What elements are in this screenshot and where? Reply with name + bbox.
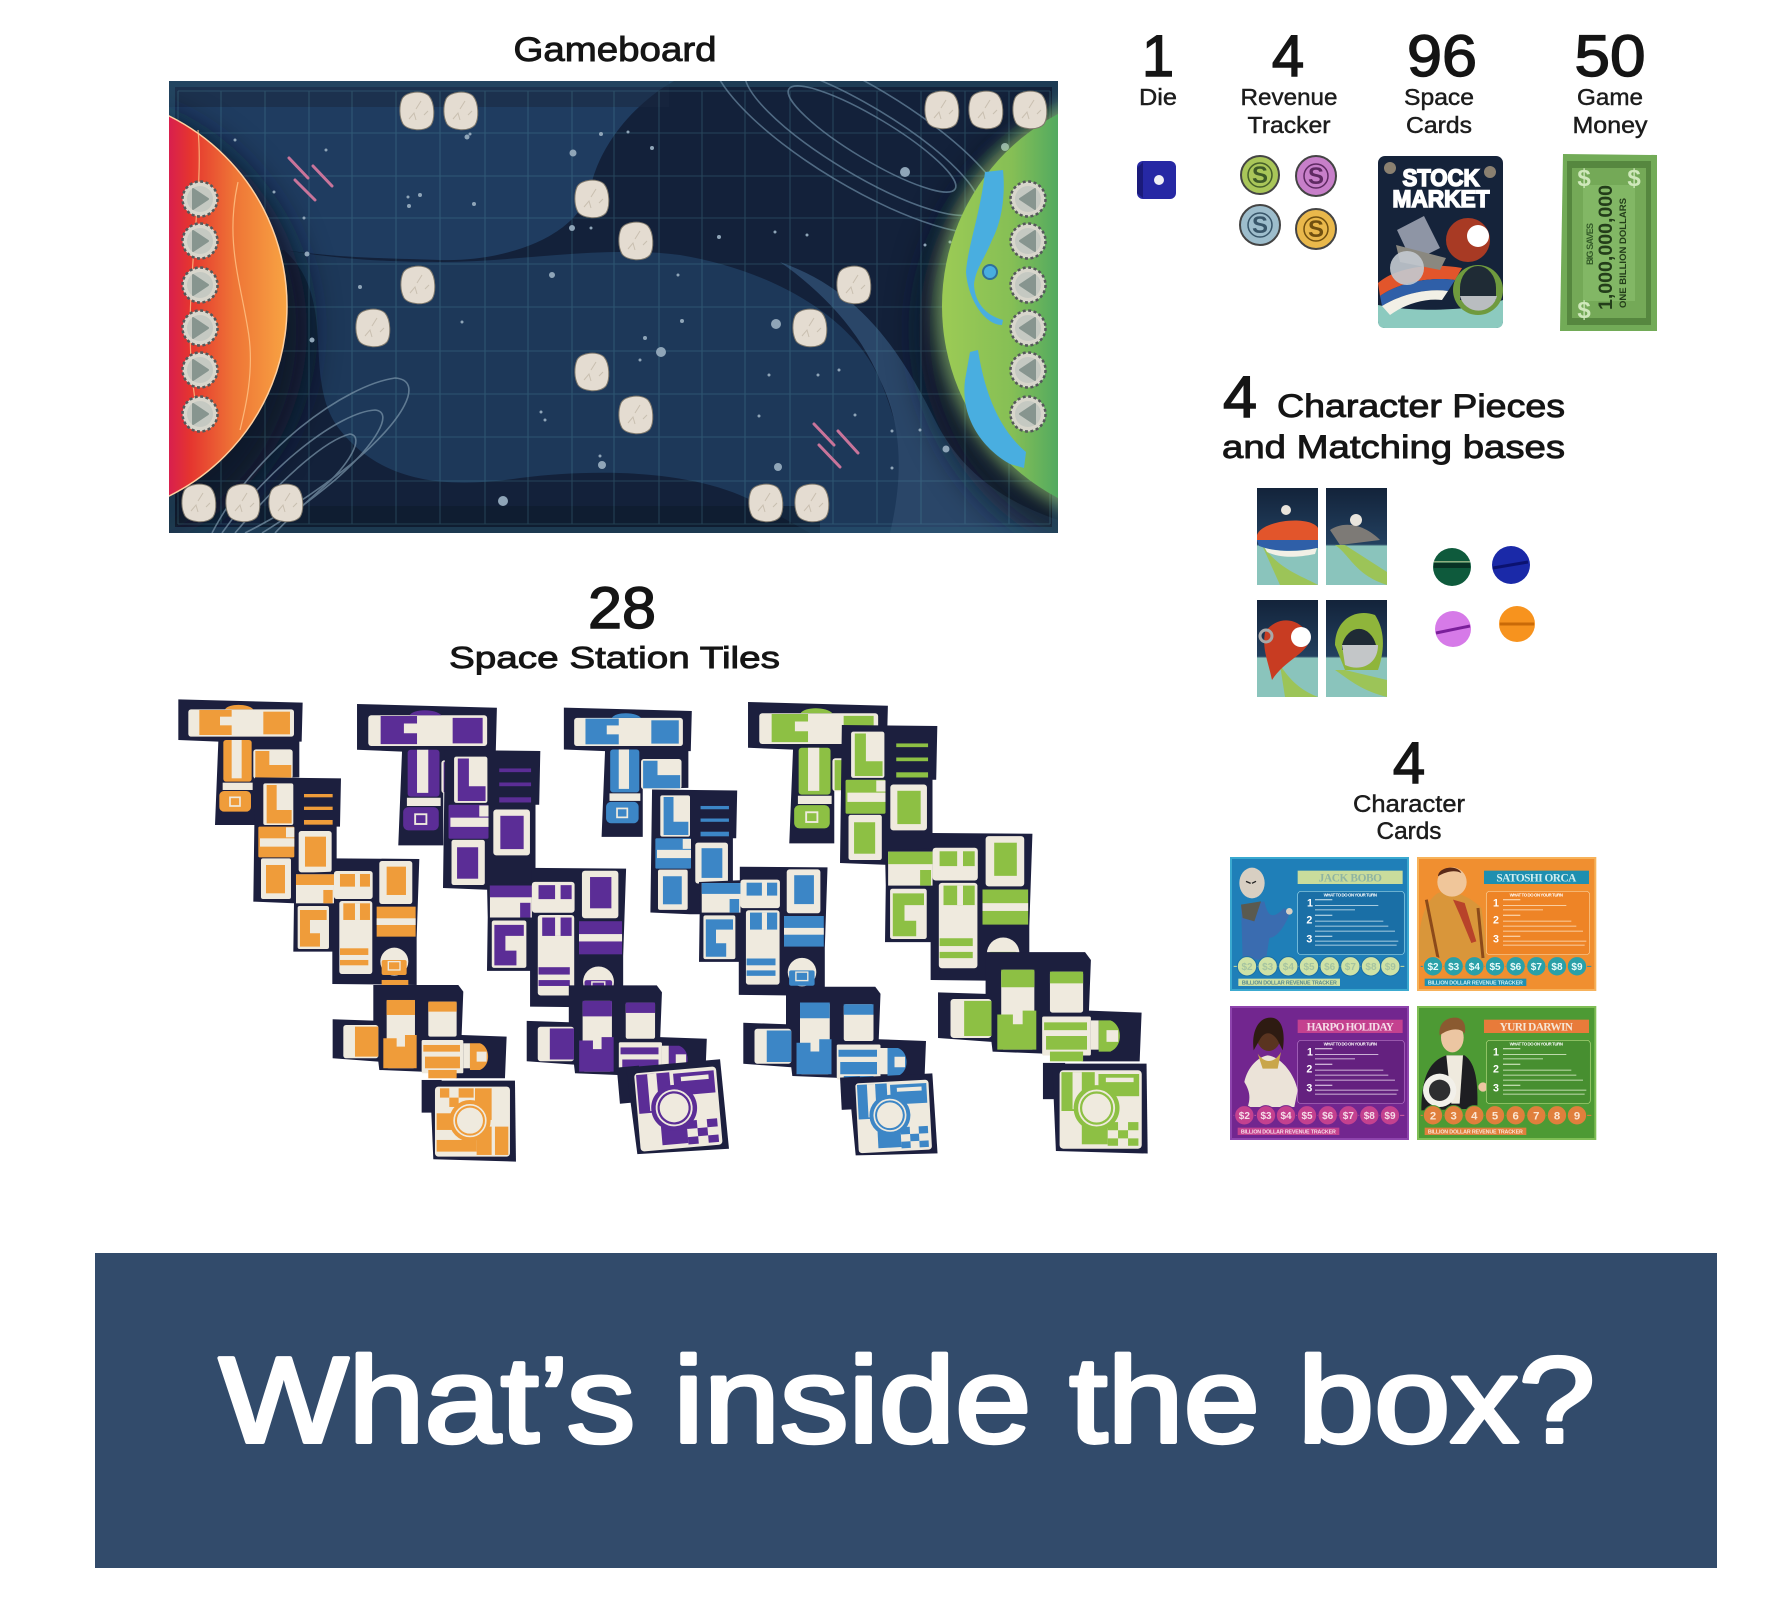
character card: Harpo Holiday: $7 <box>1343 1111 1354 1122</box>
count: 96 Space Cards: Cards <box>1406 112 1472 138</box>
banner <box>95 1253 1717 1568</box>
character card: Satoshi Orca: $4 <box>1469 962 1480 973</box>
character card: Satoshi Orca: WHAT TO DO ON YOUR TURN <box>1510 893 1563 898</box>
character card: Harpo Holiday: 3 <box>1306 1082 1312 1094</box>
tokens: left row <box>182 182 218 432</box>
character card: Jack Bobo: $4 <box>1283 962 1294 973</box>
character card: Harpo Holiday: $2 <box>1239 1111 1250 1122</box>
count: 4 Revenue Tracker: Revenue <box>1240 84 1338 110</box>
asteroids <box>182 91 1047 522</box>
heading: 4 Character Pieces and Matching bases: 4 <box>1223 365 1257 430</box>
character card: Yuri Darwin: 2 <box>1430 1110 1436 1122</box>
character card: Harpo Holiday: 1 <box>1307 1047 1313 1059</box>
tiles: purple <box>357 704 729 1158</box>
banknote: game money: $ <box>1577 297 1591 324</box>
heading: 4 Character Pieces and Matching bases <box>1222 365 1565 465</box>
piece: green globe <box>1326 600 1387 697</box>
character card: Yuri Darwin: YURI DARWIN <box>1500 1021 1574 1033</box>
character card: Jack Bobo: 3 <box>1306 933 1312 945</box>
icon: revenue tracker coins: S <box>1308 216 1324 243</box>
heading: 4 Character Cards: Character <box>1353 791 1465 818</box>
heading: 28 Space Station Tiles: 28 <box>588 576 656 641</box>
grid <box>178 91 1050 524</box>
banknote: game money <box>1560 154 1657 331</box>
character card: Satoshi Orca: SATOSHI ORCA <box>1496 872 1577 884</box>
space regions <box>169 81 1058 533</box>
character card: Jack Bobo: BILLION DOLLAR REVENUE TRACKER <box>1242 980 1337 986</box>
heading: 4 Character Cards: Cards <box>1376 818 1442 845</box>
character card: Satoshi Orca: 2 <box>1493 914 1499 926</box>
card: stock market: STOCK <box>1402 165 1480 192</box>
icon: die <box>1137 161 1176 199</box>
character card: Yuri Darwin: 8 <box>1554 1110 1560 1122</box>
character card: Harpo Holiday: 2 <box>1306 1063 1312 1075</box>
count: 1 Die: 1 <box>1142 24 1174 89</box>
count: 4 Revenue Tracker: 4 <box>1272 24 1304 89</box>
card: stock market <box>1378 156 1503 328</box>
banknote: game money: BIG SAVES <box>1585 223 1595 265</box>
count: 50 Game Money: Game <box>1577 84 1643 110</box>
orbit rings top right <box>720 81 986 232</box>
piece: red pod <box>1257 600 1318 697</box>
character card: Satoshi Orca <box>1418 858 1595 990</box>
character card: Yuri Darwin: WHAT TO DO ON YOUR TURN <box>1510 1042 1563 1047</box>
character card: Satoshi Orca: $2 <box>1427 962 1439 973</box>
count: 50 Game Money: Money <box>1572 112 1648 138</box>
piece: rocket dark <box>1326 488 1387 585</box>
character card: Harpo Holiday: $9 <box>1384 1111 1396 1122</box>
icon: revenue tracker coins <box>1240 156 1336 249</box>
stars <box>234 130 1009 506</box>
character card: Satoshi Orca: $8 <box>1551 962 1563 973</box>
character card: Harpo Holiday: $5 <box>1301 1111 1313 1122</box>
tiles: green <box>748 702 1148 1154</box>
character card: Jack Bobo: $3 <box>1262 962 1274 973</box>
character card: Yuri Darwin: 2 <box>1493 1063 1499 1075</box>
character card: Satoshi Orca: $7 <box>1531 962 1542 973</box>
character card: Jack Bobo: $7 <box>1345 962 1356 973</box>
character card: Jack Bobo: 1 <box>1307 898 1313 910</box>
character card: Harpo Holiday <box>1231 1007 1408 1139</box>
planet: mars <box>169 115 288 497</box>
tiles: blue <box>564 708 938 1158</box>
water <box>966 170 1004 325</box>
character card: Harpo Holiday: BILLION DOLLAR REVENUE TRACKER <box>1241 1129 1336 1135</box>
count: 4 Revenue Tracker: Tracker <box>1248 112 1331 138</box>
character card: Jack Bobo: 2 <box>1306 914 1312 926</box>
character card: Harpo Holiday: HARPO HOLIDAY <box>1307 1021 1394 1033</box>
character pieces <box>1257 488 1387 697</box>
character card: Yuri Darwin: 3 <box>1493 1082 1499 1094</box>
character card: Harpo Holiday: WHAT TO DO ON YOUR TURN <box>1324 1042 1377 1047</box>
character card: Yuri Darwin: BILLION DOLLAR REVENUE TRACKER <box>1428 1129 1523 1135</box>
board frame <box>172 84 1055 530</box>
heading: 28 Space Station Tiles: Space Station Tiles <box>449 640 780 675</box>
banknote: game money: $ <box>1627 165 1641 192</box>
count: 96 Space Cards: 96 <box>1407 24 1477 89</box>
character card: Yuri Darwin: 4 <box>1471 1110 1478 1122</box>
character card: Yuri Darwin: 5 <box>1492 1110 1498 1122</box>
character card: Satoshi Orca: $9 <box>1571 962 1583 973</box>
character card: Satoshi Orca: $3 <box>1448 962 1460 973</box>
count: 1 Die <box>1139 24 1177 110</box>
heading: 4 Character Cards: 4 <box>1393 731 1425 796</box>
heading: 4 Character Cards <box>1353 731 1465 845</box>
character card: Harpo Holiday: $8 <box>1364 1111 1375 1122</box>
count: 50 Game Money <box>1572 24 1648 138</box>
count: 4 Revenue Tracker <box>1240 24 1338 138</box>
character card: Yuri Darwin: 6 <box>1513 1110 1519 1122</box>
heading: 4 Character Pieces and Matching bases: and Matching bases <box>1222 429 1565 465</box>
icon: revenue tracker coins: S <box>1252 162 1268 189</box>
planet: earth <box>924 94 1058 516</box>
character card: Yuri Darwin: 9 <box>1574 1110 1580 1122</box>
icon: revenue tracker coins: S <box>1252 212 1268 239</box>
character card: Harpo Holiday: $6 <box>1322 1111 1334 1122</box>
character card: Jack Bobo: $5 <box>1303 962 1315 973</box>
character card: Jack Bobo: $9 <box>1385 962 1396 973</box>
character card: Satoshi Orca: 1 <box>1493 898 1499 910</box>
character card: Yuri Darwin <box>1418 1007 1595 1139</box>
character card: Harpo Holiday: $4 <box>1280 1111 1292 1122</box>
character card: Jack Bobo: WHAT TO DO ON YOUR TURN <box>1324 893 1377 898</box>
count: 96 Space Cards <box>1404 24 1477 138</box>
gameboard <box>169 81 1058 533</box>
tokens: right row <box>1010 182 1046 432</box>
banner title: What’s inside the box? <box>219 1332 1595 1468</box>
orbit rings lower left <box>212 378 409 533</box>
heading: 28 Space Station Tiles <box>449 576 780 675</box>
character card: Jack Bobo: $2 <box>1241 962 1253 973</box>
icon: revenue tracker coins: S <box>1308 163 1324 190</box>
character card: Harpo Holiday: $3 <box>1260 1111 1272 1122</box>
character card: Jack Bobo: $6 <box>1324 962 1336 973</box>
character card: Satoshi Orca: $6 <box>1510 962 1522 973</box>
count: 1 Die: Die <box>1139 84 1177 110</box>
character card: Yuri Darwin: 7 <box>1533 1110 1539 1122</box>
character card: Jack Bobo <box>1231 858 1408 990</box>
banknote: game money: $ <box>1577 165 1591 192</box>
card: stock market: MARKET <box>1392 186 1490 213</box>
heading: 4 Character Pieces and Matching bases: Character Pieces <box>1277 388 1565 424</box>
character card: Satoshi Orca: $5 <box>1489 962 1501 973</box>
banknote: game money: ONE BILLION DOLLARS <box>1618 198 1628 308</box>
heading: Gameboard: Gameboard <box>514 31 716 69</box>
piece: saucer <box>1257 488 1318 585</box>
shadow around planets <box>169 106 1058 533</box>
matching bases <box>1433 546 1535 647</box>
banknote: game money: 1,000,000,000 <box>1596 185 1617 310</box>
character card: Satoshi Orca: BILLION DOLLAR REVENUE TRACKER <box>1428 980 1523 986</box>
character card: Yuri Darwin: 1 <box>1493 1047 1499 1059</box>
character card: Yuri Darwin: 3 <box>1451 1110 1457 1122</box>
character card: Jack Bobo: $8 <box>1365 962 1377 973</box>
count: 96 Space Cards: Space <box>1404 84 1474 110</box>
character card: Satoshi Orca: 3 <box>1493 933 1499 945</box>
pink streaks <box>289 158 858 467</box>
tiles: orange <box>178 699 516 1162</box>
count: 50 Game Money: 50 <box>1574 24 1646 89</box>
character card: Jack Bobo: JACK BOBO <box>1319 872 1382 884</box>
